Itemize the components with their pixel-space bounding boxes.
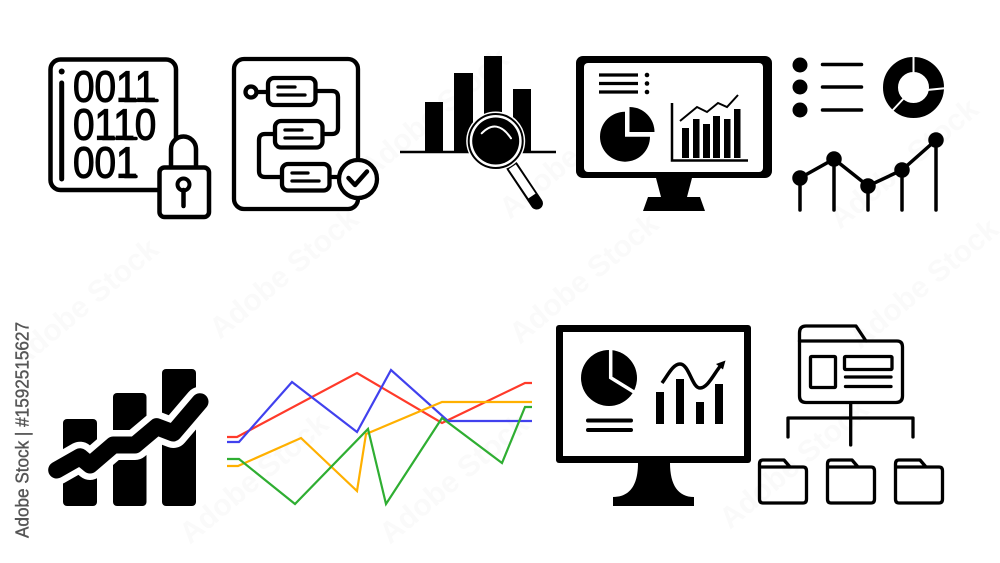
faint watermark pattern: Adobe Stock (493, 82, 655, 225)
faint watermark pattern: Adobe Stock (823, 92, 985, 235)
binary digits: 0011 (73, 61, 156, 111)
check badge (339, 160, 377, 198)
icon: monitor with dashboard (576, 56, 772, 211)
faint watermark pattern: Adobe Stock (353, 42, 515, 185)
blue series (227, 370, 532, 442)
monitor stand (613, 463, 694, 506)
child folder 1 (760, 460, 806, 503)
faint watermark pattern: Adobe Stock (203, 202, 365, 345)
icon: bar chart under magnifying glass (400, 56, 556, 203)
donut chart (890, 55, 947, 111)
green series (227, 407, 532, 504)
faint watermark pattern: Adobe Stock (373, 407, 535, 550)
icon: large monitor with charts (556, 325, 751, 506)
faint watermark pattern: Adobe Stock (173, 407, 335, 550)
box text lines (278, 87, 319, 181)
stock id side label: Adobe Stock | #1592515627 (12, 322, 32, 538)
orange series (227, 402, 532, 491)
child folder 3 (896, 460, 942, 503)
padlock (160, 136, 209, 217)
parent folder (800, 326, 902, 402)
faint watermark pattern: Adobe Stock (713, 392, 875, 535)
faint watermark pattern: Adobe Stock (503, 207, 665, 350)
red series (227, 373, 532, 437)
pie chart (581, 348, 637, 406)
binary digits: 001 (73, 137, 138, 187)
icon: flowchart document with check mark (234, 59, 377, 209)
binary digits: 0110 (73, 99, 156, 149)
icon: binary data with padlock (50, 60, 209, 217)
binary digits (73, 61, 156, 187)
monitor stand (643, 178, 705, 211)
dot line chart (794, 134, 942, 210)
bar chart with trend line (672, 95, 748, 160)
connectors (316, 91, 338, 134)
bars and arrow trend (656, 360, 726, 424)
icon: folder hierarchy (760, 326, 942, 503)
start node (246, 86, 256, 98)
magnifying glass (466, 112, 537, 203)
bars (425, 56, 531, 152)
icon: growth bars with trend line (57, 369, 200, 506)
faint watermark pattern: Adobe Stock (3, 232, 165, 375)
multi-series line chart (227, 370, 532, 504)
icon: list, donut and dot line chart (792, 55, 947, 210)
bullet list (792, 58, 862, 118)
flow boxes (268, 78, 316, 105)
child folder 2 (828, 460, 874, 503)
caption lines (588, 420, 631, 430)
list lines (599, 75, 638, 92)
pie chart (600, 107, 654, 162)
tree connector (788, 404, 913, 445)
